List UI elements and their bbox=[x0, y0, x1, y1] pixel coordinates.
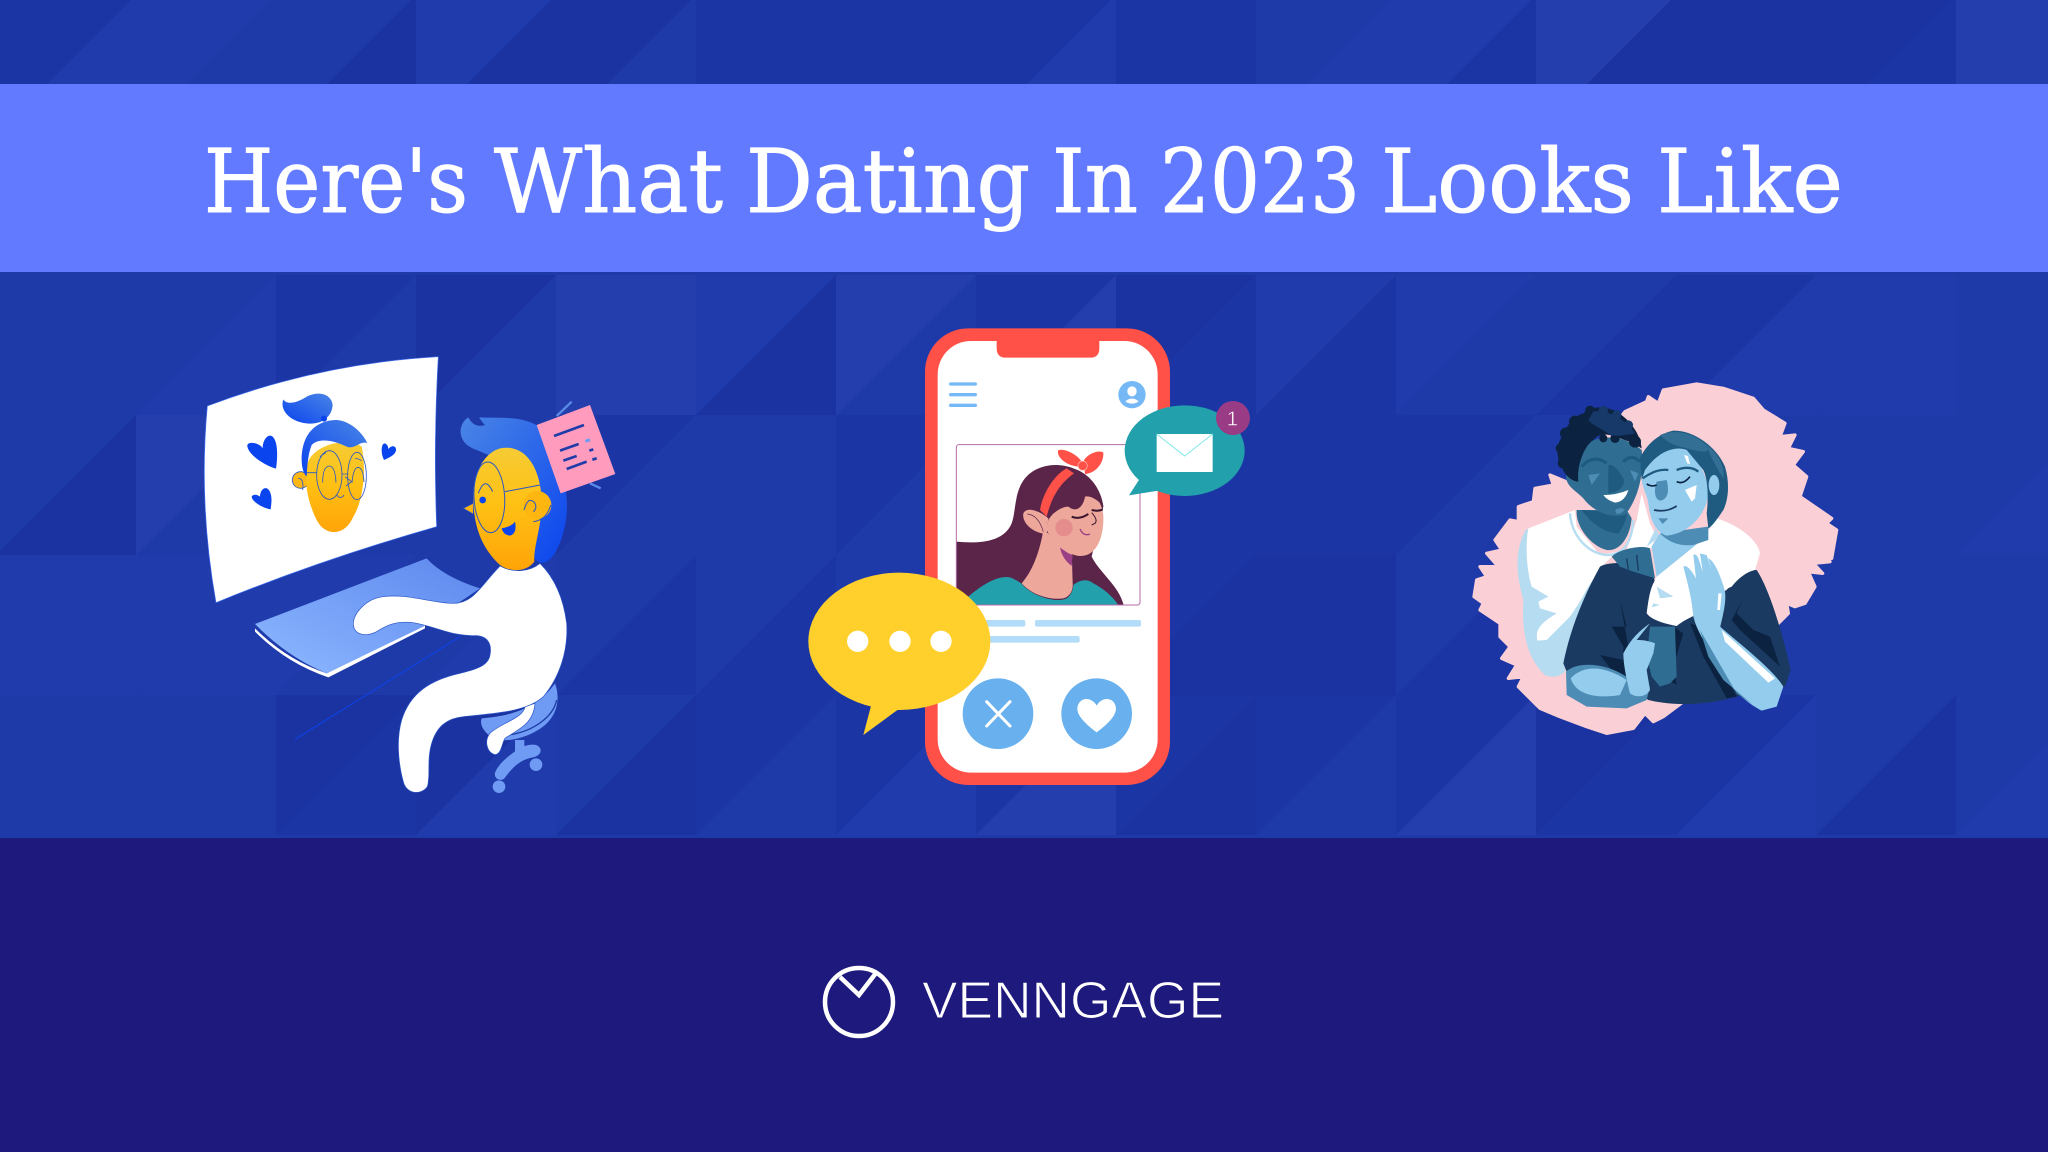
title: Here's bbox=[204, 130, 468, 233]
illustration: happy couple embracing bbox=[1474, 384, 1837, 733]
dark shirt bbox=[1563, 563, 1791, 704]
title: What bbox=[494, 130, 723, 233]
phone screen bbox=[938, 341, 1158, 773]
title bbox=[204, 130, 1843, 233]
hair bbox=[1640, 431, 1728, 528]
profile text lines bbox=[983, 620, 1141, 643]
phone body bbox=[925, 328, 1170, 785]
clasped hands bbox=[1647, 627, 1677, 687]
white sleeve around the chest bbox=[1647, 518, 1760, 626]
pink splash bbox=[1474, 384, 1837, 733]
phone notch bbox=[997, 340, 1099, 358]
second leg bbox=[487, 703, 535, 755]
button: like bbox=[1061, 678, 1132, 749]
wordmark: VENNGAGE bbox=[922, 972, 1224, 1030]
illustration: dating app on a phone bbox=[808, 328, 1250, 785]
face bbox=[1566, 437, 1642, 516]
man in dark shirt bbox=[1563, 431, 1791, 711]
footer band bbox=[0, 838, 2048, 1152]
curly hair bbox=[1557, 407, 1642, 482]
head bbox=[461, 417, 567, 570]
desk shadow line bbox=[295, 637, 460, 739]
shirt shadow side bbox=[1518, 529, 1607, 677]
neck bbox=[1652, 527, 1708, 577]
neck bbox=[1577, 510, 1632, 550]
title: Like bbox=[1657, 130, 1843, 233]
icon: menu bbox=[951, 384, 975, 405]
man in white shirt bbox=[1518, 406, 1660, 677]
button: reject bbox=[963, 678, 1033, 749]
icon: venngage mark bbox=[825, 968, 893, 1036]
collar bbox=[1570, 513, 1633, 555]
raised arm and hand bbox=[1693, 617, 1783, 711]
title band bbox=[0, 84, 2048, 272]
shirt shadows bbox=[1600, 600, 1780, 698]
forearm bbox=[1566, 665, 1650, 708]
notification badge: 1 bbox=[1227, 408, 1238, 431]
icon: teal message bubble bbox=[1125, 401, 1250, 496]
icon: hearts bbox=[247, 436, 396, 509]
hand on shoulder bbox=[1612, 547, 1655, 578]
title: In bbox=[1052, 130, 1138, 233]
logo: venngage bbox=[825, 968, 1224, 1036]
title: Dating bbox=[746, 130, 1030, 233]
white shirt bbox=[1527, 493, 1657, 641]
title: 2023 bbox=[1160, 130, 1360, 233]
note card bbox=[537, 402, 615, 493]
icon: profile avatar bbox=[1118, 381, 1146, 408]
profile photo bbox=[956, 445, 1140, 607]
icon: desk chair bbox=[481, 683, 558, 793]
face bbox=[1642, 445, 1708, 536]
keyboard bbox=[255, 558, 480, 677]
monitor bbox=[204, 357, 438, 603]
body in white sweater bbox=[353, 563, 567, 792]
title: Looks bbox=[1381, 130, 1634, 233]
icon: envelope bbox=[1157, 434, 1213, 472]
on-screen face bbox=[282, 394, 367, 532]
icon: yellow chat bubble bbox=[808, 573, 990, 735]
illustration: man on a video date at a computer bbox=[204, 357, 615, 793]
